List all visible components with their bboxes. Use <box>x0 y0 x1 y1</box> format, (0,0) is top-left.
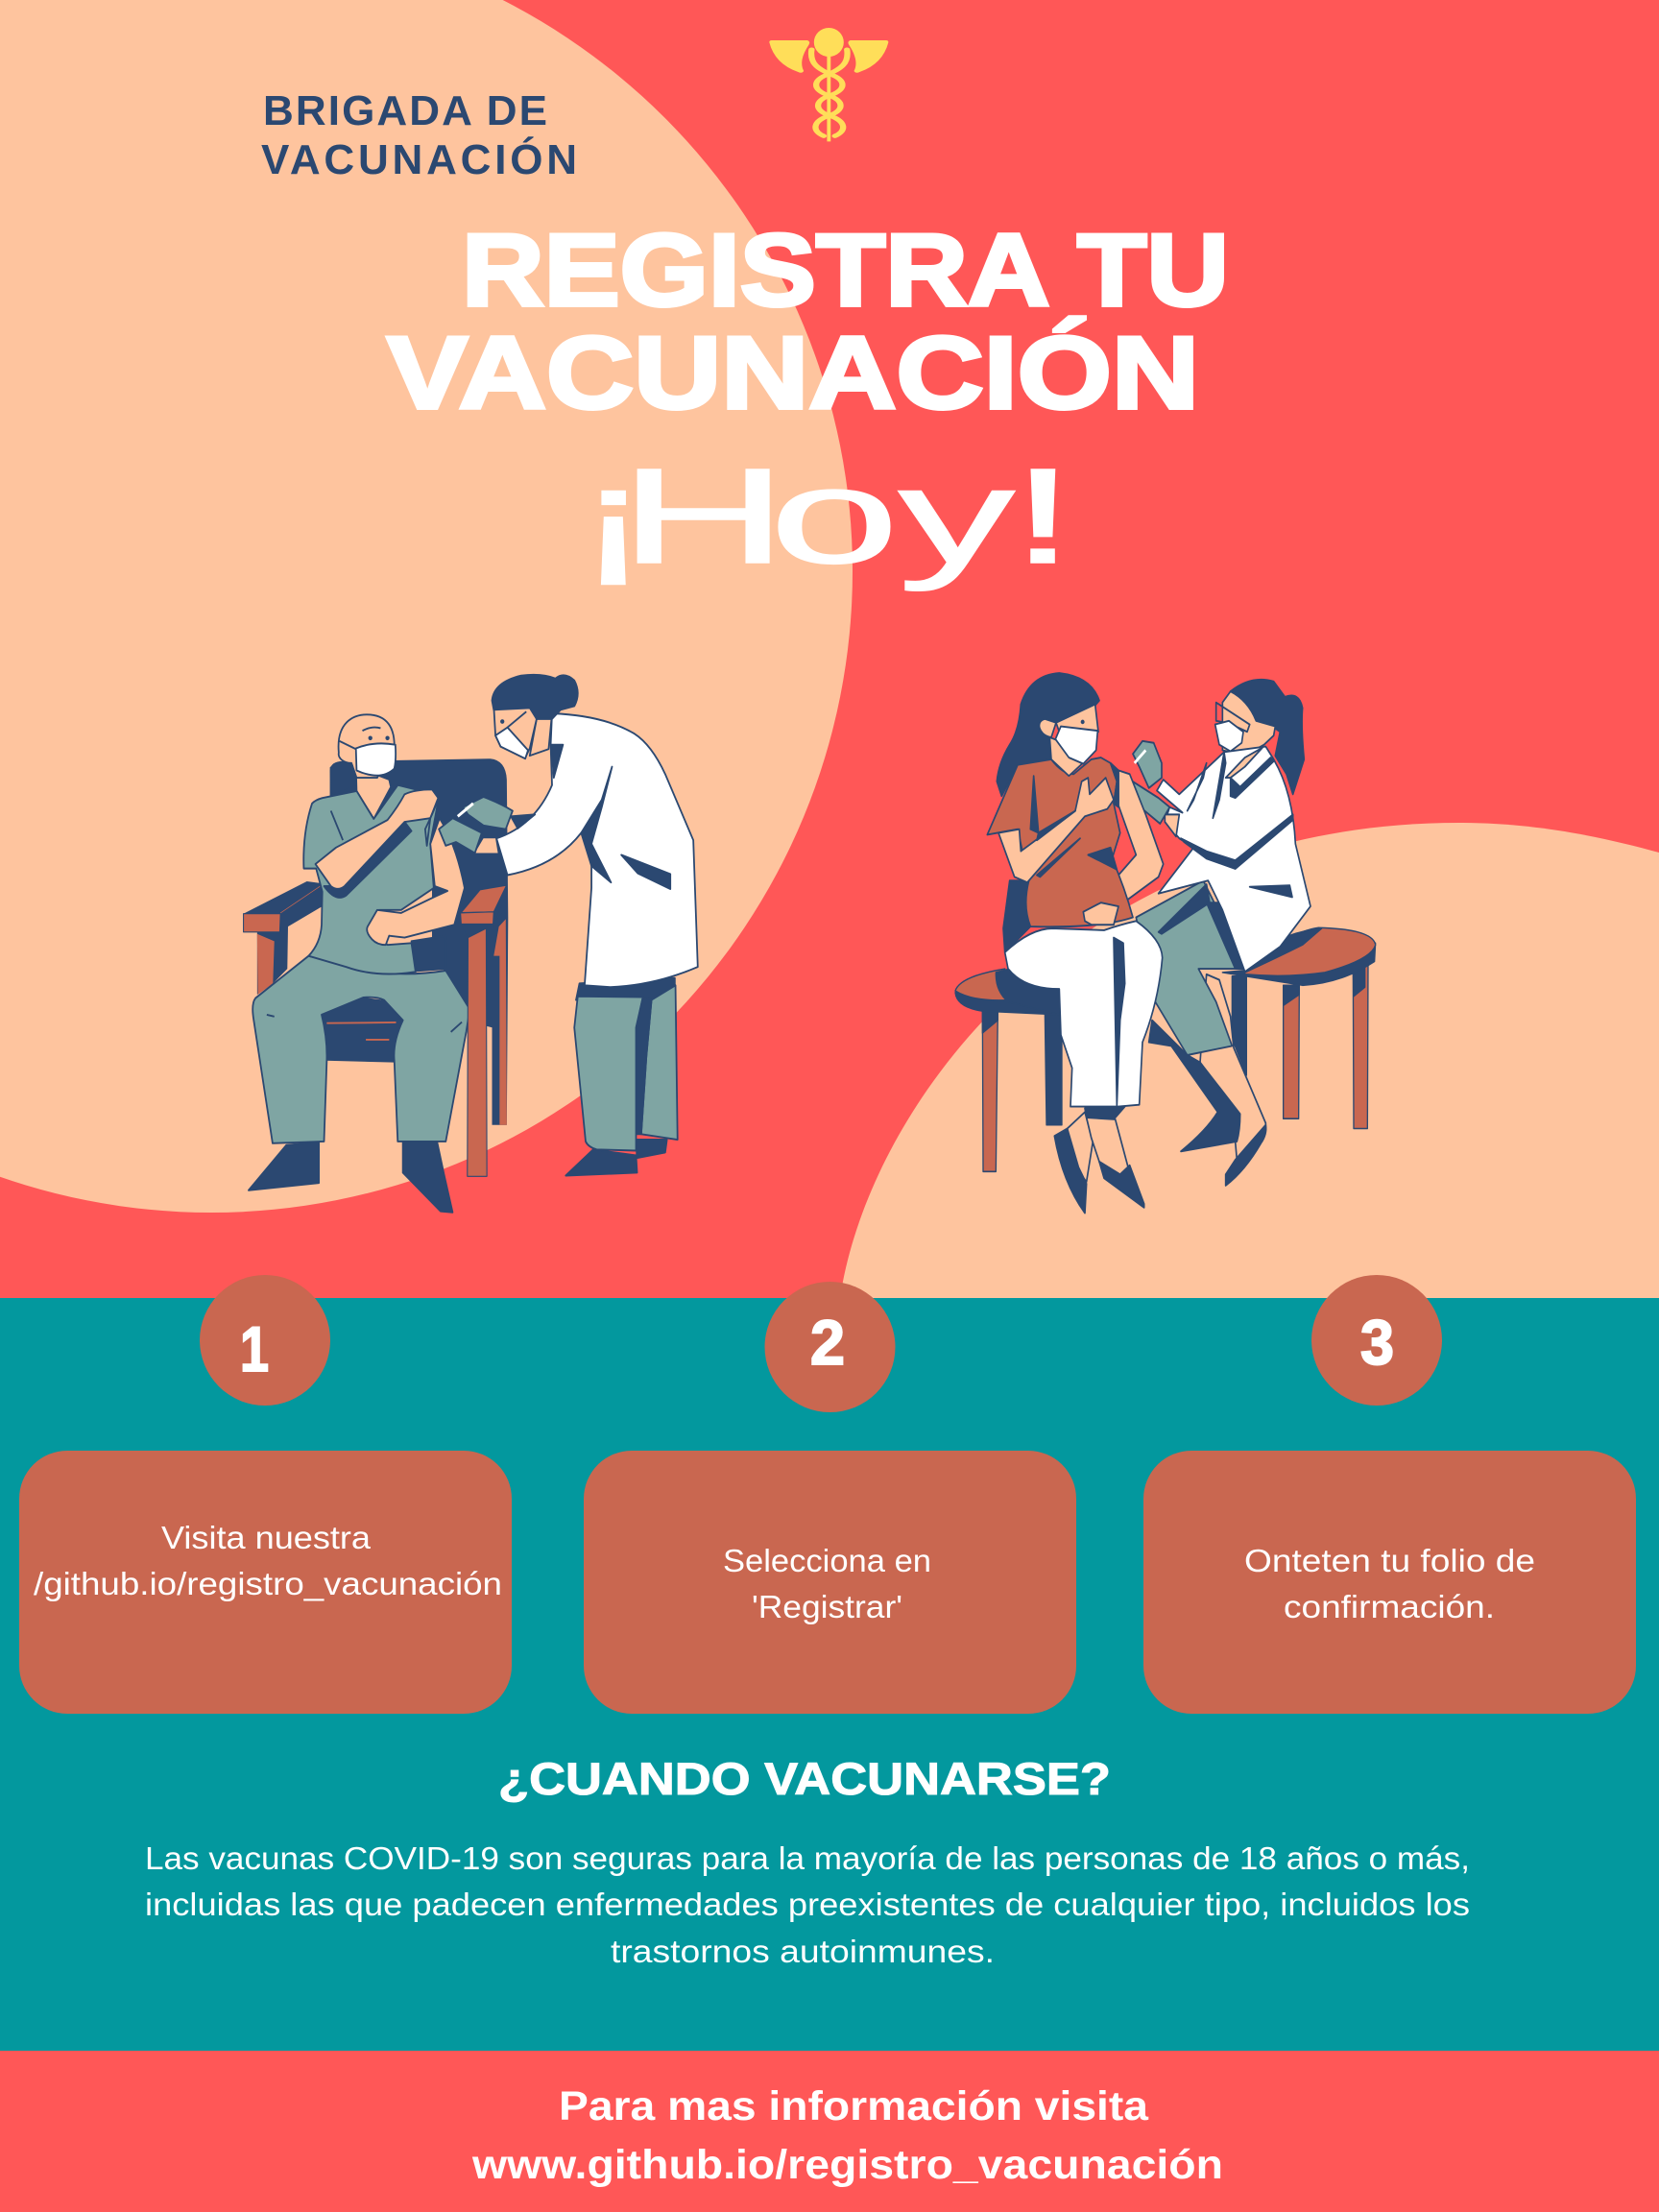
step 1 number badge <box>200 1275 330 1406</box>
step 3 number badge: 3 <box>1360 1307 1394 1378</box>
step 1 card <box>19 1451 512 1714</box>
body text: Las vacunas COVID-19 son seguras para la mayoría de las personas de 18 años o más, <box>145 1840 1470 1876</box>
headline: today: ¡Hoy! <box>575 441 1075 592</box>
brand name <box>261 87 577 183</box>
footer text: www.github.io/registro_vacunación <box>471 2142 1223 2188</box>
step 1 number badge: 1 <box>240 1313 269 1384</box>
illustration: man being vaccinated <box>244 675 698 1213</box>
icon: caduceus <box>769 28 888 141</box>
brand name: VACUNACIÓN <box>261 135 577 183</box>
footer text <box>471 2083 1223 2188</box>
brand name: BRIGADA DE <box>263 87 547 134</box>
man <box>249 714 469 1213</box>
chair <box>244 758 508 1125</box>
title: REGISTRA TU <box>462 212 1229 327</box>
step 1 card: Visita nuestra <box>161 1520 372 1555</box>
step 1 card: /github.io/registro_vacunación <box>34 1566 502 1601</box>
background shape: peach circle top left <box>0 0 853 1213</box>
step 2 card: Selecciona en <box>723 1543 931 1578</box>
nurse <box>1118 680 1310 1186</box>
woman <box>987 673 1164 1214</box>
footer text: Para mas información visita <box>559 2083 1149 2129</box>
step 3 number badge <box>1311 1275 1442 1406</box>
step 2 card <box>584 1451 1076 1714</box>
step 2 number badge: 2 <box>810 1307 845 1378</box>
step 2 number badge <box>764 1282 895 1412</box>
section heading: ¿CUANDO VACUNARSE? <box>498 1753 1111 1804</box>
step 3 card: confirmación. <box>1284 1589 1495 1624</box>
title: VACUNACIÓN <box>387 315 1199 430</box>
illustration: woman being vaccinated <box>955 673 1376 1214</box>
chair front <box>461 885 508 1176</box>
title <box>387 212 1229 430</box>
stools <box>955 927 1376 1171</box>
step 2 card: 'Registrar' <box>752 1589 902 1624</box>
footer band <box>0 2051 1659 2212</box>
step 3 card <box>1143 1451 1636 1714</box>
body text: incluidas las que padecen enfermedades preexistentes de cualquier tipo, incluidos los <box>145 1887 1470 1922</box>
body text <box>145 1840 1470 1969</box>
step 3 card: Onteten tu folio de <box>1244 1543 1535 1578</box>
body text: trastornos autoinmunes. <box>611 1934 995 1969</box>
teal steps panel <box>0 1298 1659 2051</box>
background shape: peach hill bottom right <box>840 823 1659 1298</box>
doctor <box>439 675 698 1176</box>
